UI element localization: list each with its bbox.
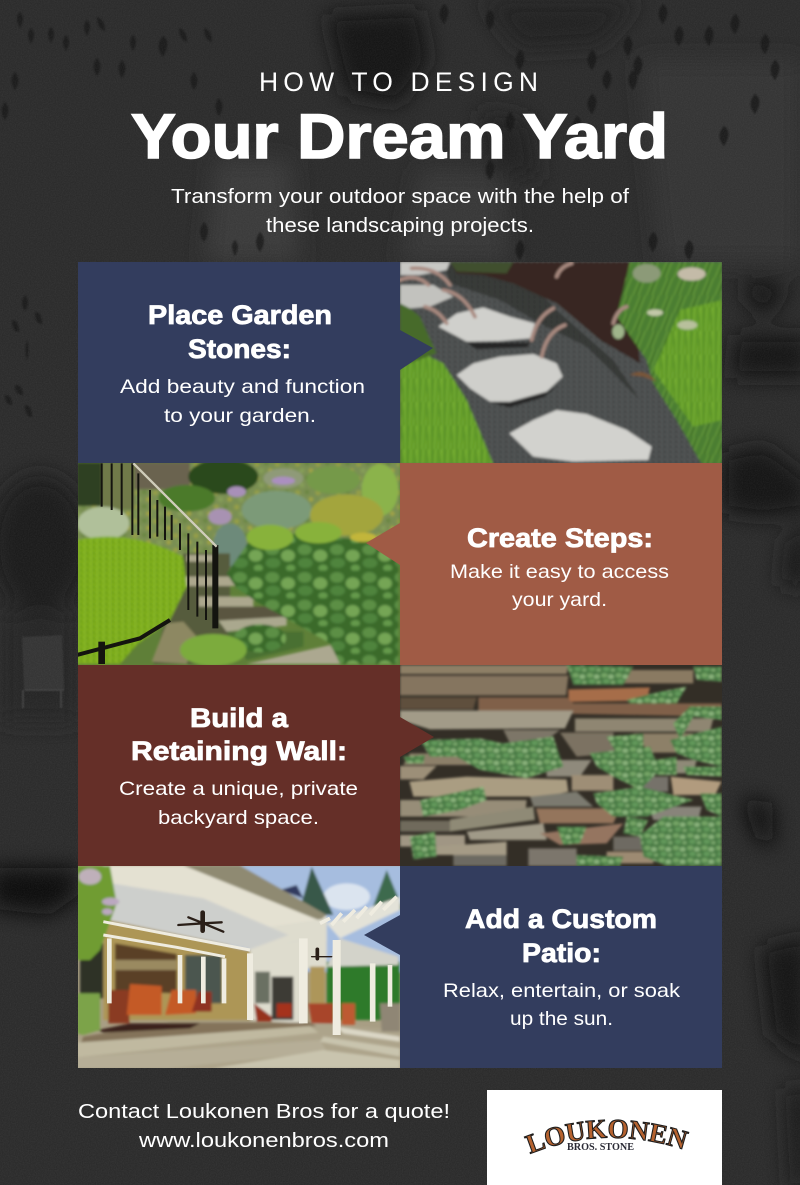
- subtitle: these landscaping projects.: [266, 214, 534, 237]
- photo: stacked stone retaining wall with vines: [400, 665, 722, 866]
- kicker: how to design: HOW TO DESIGN: [259, 67, 538, 97]
- contact call to action: Contact Loukonen Bros for a quote!: [78, 1101, 450, 1123]
- background: hanging leaf silhouettes, left: [2, 12, 264, 256]
- photo: stepping stones in gravel: [400, 260, 722, 465]
- subtitle: Transform your outdoor space with the help of: [171, 185, 629, 208]
- panel text: backyard space.: [158, 807, 319, 829]
- background: lawn chair: [22, 635, 64, 708]
- panel text: Relax, entertain, or soak: [443, 980, 680, 1002]
- subtitle: [171, 185, 629, 237]
- panel heading: [148, 300, 332, 364]
- contact call to action: www.loukonenbros.com: [138, 1130, 389, 1152]
- panel text: Make it easy to access: [450, 561, 669, 583]
- background: small tree leaves, left: [5, 295, 42, 417]
- panel text: to your garden.: [164, 405, 316, 427]
- panel background with arrow: [366, 463, 722, 665]
- panel heading: [131, 703, 347, 766]
- photo: garden steps with railing: [77, 459, 400, 666]
- panel heading: Add a Custom: [465, 904, 657, 934]
- panel: create steps: [366, 463, 722, 665]
- panel background with arrow: [364, 866, 722, 1068]
- panel text: [120, 376, 365, 427]
- panel: place garden stones: [78, 262, 433, 463]
- panel text: [119, 778, 358, 829]
- background: hanging leaf silhouettes, right: [440, 4, 780, 260]
- panel: build a retaining wall: [78, 665, 434, 866]
- logo: Loukonen Bros. Stone: BROS. STONE: [567, 1141, 634, 1153]
- contact call to action: [78, 1101, 450, 1152]
- panel background with arrow: [78, 262, 433, 463]
- panel heading: Build a: [190, 703, 289, 733]
- panel text: your yard.: [512, 589, 607, 611]
- panel text: [443, 980, 680, 1030]
- panel: add a custom patio: [364, 866, 722, 1068]
- panel heading: Patio:: [522, 938, 601, 968]
- panel heading: Place Garden: [148, 300, 332, 330]
- panel heading: Retaining Wall:: [131, 736, 347, 766]
- panel heading: Stones:: [188, 334, 291, 364]
- title: Your Dream Yard: [131, 102, 668, 172]
- panel text: up the sun.: [510, 1008, 613, 1030]
- heading block: [131, 67, 668, 237]
- photo: covered patio with pergola: [77, 865, 403, 1068]
- panel heading: [465, 904, 657, 968]
- panel text: Create a unique, private: [119, 778, 358, 800]
- panel heading: Create Steps:: [467, 523, 653, 553]
- logo: Loukonen Bros. Stone: LOUKONEN: [524, 1119, 690, 1154]
- logo: Loukonen Bros. Stone: [487, 1090, 722, 1185]
- panel background with arrow: [78, 665, 434, 866]
- panel text: [450, 561, 669, 611]
- panel text: Add beauty and function: [120, 376, 365, 398]
